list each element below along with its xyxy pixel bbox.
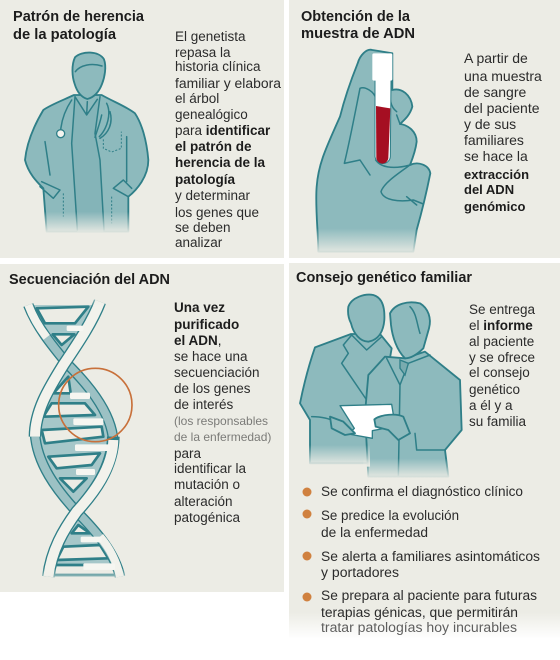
text: muestra de sangre: del paciente [464, 100, 540, 116]
list item: evolución [302, 508, 459, 540]
text: informe [469, 302, 536, 429]
text: secuenciación: (los responsables [174, 414, 268, 428]
text: muestra de sangre: familiares [464, 132, 524, 148]
text: genetista: para identificar [175, 123, 271, 138]
text: muestra de sangre: se hace la [464, 148, 528, 164]
text: informe: a él y a [469, 398, 513, 413]
text: secuenciación: identificar la [174, 461, 247, 476]
list item: terapias: tratar patologías hoy incurables [321, 620, 517, 635]
list item: familiares [302, 549, 540, 580]
panel: consejo genético familiar [289, 263, 560, 639]
text: muestra de sangre: y de sus [464, 116, 516, 132]
list item: terapias: Se prepara al paciente para futuras [321, 588, 537, 603]
text: secuenciación: purificado [174, 317, 239, 332]
text: informe: al paciente [469, 334, 534, 349]
text: secuenciación: secuenciación [174, 365, 260, 380]
list item: evolución: de la enfermedad [321, 525, 428, 540]
text: secuenciación: el ADN, [174, 333, 222, 348]
list item: familiares: y portadores [321, 565, 399, 580]
icon: two people with tablet [295, 295, 462, 479]
text: muestra de sangre: del ADN [464, 182, 514, 197]
text: secuenciación: de los genes [174, 381, 251, 396]
text: genetista: herencia de la [175, 155, 266, 170]
text: informe: el informe [469, 318, 533, 333]
text: muestra de sangre: genómico [464, 199, 525, 214]
text: secuenciación: Una vez [174, 300, 225, 315]
text: muestra de sangre: de sangre [464, 84, 526, 100]
panel: patrón de herencia [0, 0, 284, 258]
heading: secuenciación del ADN: Secuenciación del ADN [9, 272, 170, 288]
text: secuenciación: patogénica [174, 510, 241, 525]
text: genetista: genealógico [175, 107, 248, 122]
text: muestra de sangre: extracción [464, 167, 529, 182]
text: genetista: patología [175, 172, 235, 187]
text: muestra de sangre: una muestra [464, 68, 542, 84]
text: informe: Se entrega [469, 302, 536, 317]
list item: terapias: terapias génicas, que permitirán [321, 605, 518, 620]
text: secuenciación: para [174, 446, 202, 461]
text: informe: su familia [469, 414, 527, 429]
icon: hand holding blood tube [313, 50, 430, 255]
text: muestra de sangre: A partir de [464, 50, 528, 66]
icon: doctor [25, 53, 148, 234]
text: genetista: y determinar [175, 188, 251, 203]
text: informe: y se ofrece [469, 350, 535, 365]
heading: obtención de la muestra [301, 9, 415, 42]
text: informe: genético [469, 382, 520, 397]
list item: terapias [302, 588, 537, 635]
text: genetista: El genetista [175, 29, 246, 44]
heading: obtención de la muestra: Obtención de la [301, 9, 411, 25]
text: genetista: el árbol [175, 91, 219, 106]
chart: DNA double helix with highlight circle [17, 292, 133, 585]
text: secuenciación: de interés [174, 397, 234, 412]
text: muestra de sangre [464, 50, 542, 214]
heading: obtención de la muestra: muestra de ADN [301, 26, 415, 42]
panel: secuenciación del ADN [0, 264, 284, 592]
panel: obtención de la muestra [289, 0, 560, 258]
heading: patrón de herencia: Patrón de herencia [13, 9, 145, 25]
heading: patrón de herencia [13, 9, 145, 43]
list item: diagnóstico: Se confirma el diagnóstico clínico [321, 484, 523, 499]
heading: patrón de herencia: de la patología [13, 27, 117, 43]
text: secuenciación [174, 300, 271, 525]
text: secuenciación: mutación o [174, 477, 240, 492]
text: genetista: el patrón de [175, 139, 252, 154]
list item: evolución: Se predice la evolución [321, 508, 459, 523]
text: genetista: repasa la [175, 45, 231, 60]
list: consequences [302, 484, 540, 635]
text: genetista: analizar [175, 235, 223, 250]
heading: consejo genético familiar: Consejo genético familiar [296, 270, 472, 286]
text: genetista: familiar y elabora [175, 76, 282, 91]
text: informe: el consejo [469, 365, 530, 380]
text: genetista: se deben [175, 220, 231, 235]
text: genetista: los genes que [175, 205, 259, 220]
text: secuenciación: alteración [174, 494, 233, 509]
text: secuenciación: se hace una [174, 349, 248, 364]
list item: familiares: Se alerta a familiares asintomáticos [321, 549, 540, 564]
text: secuenciación: de la enfermedad) [174, 430, 271, 444]
text: genetista: historia clínica [175, 59, 261, 74]
text: genetista [175, 29, 282, 250]
